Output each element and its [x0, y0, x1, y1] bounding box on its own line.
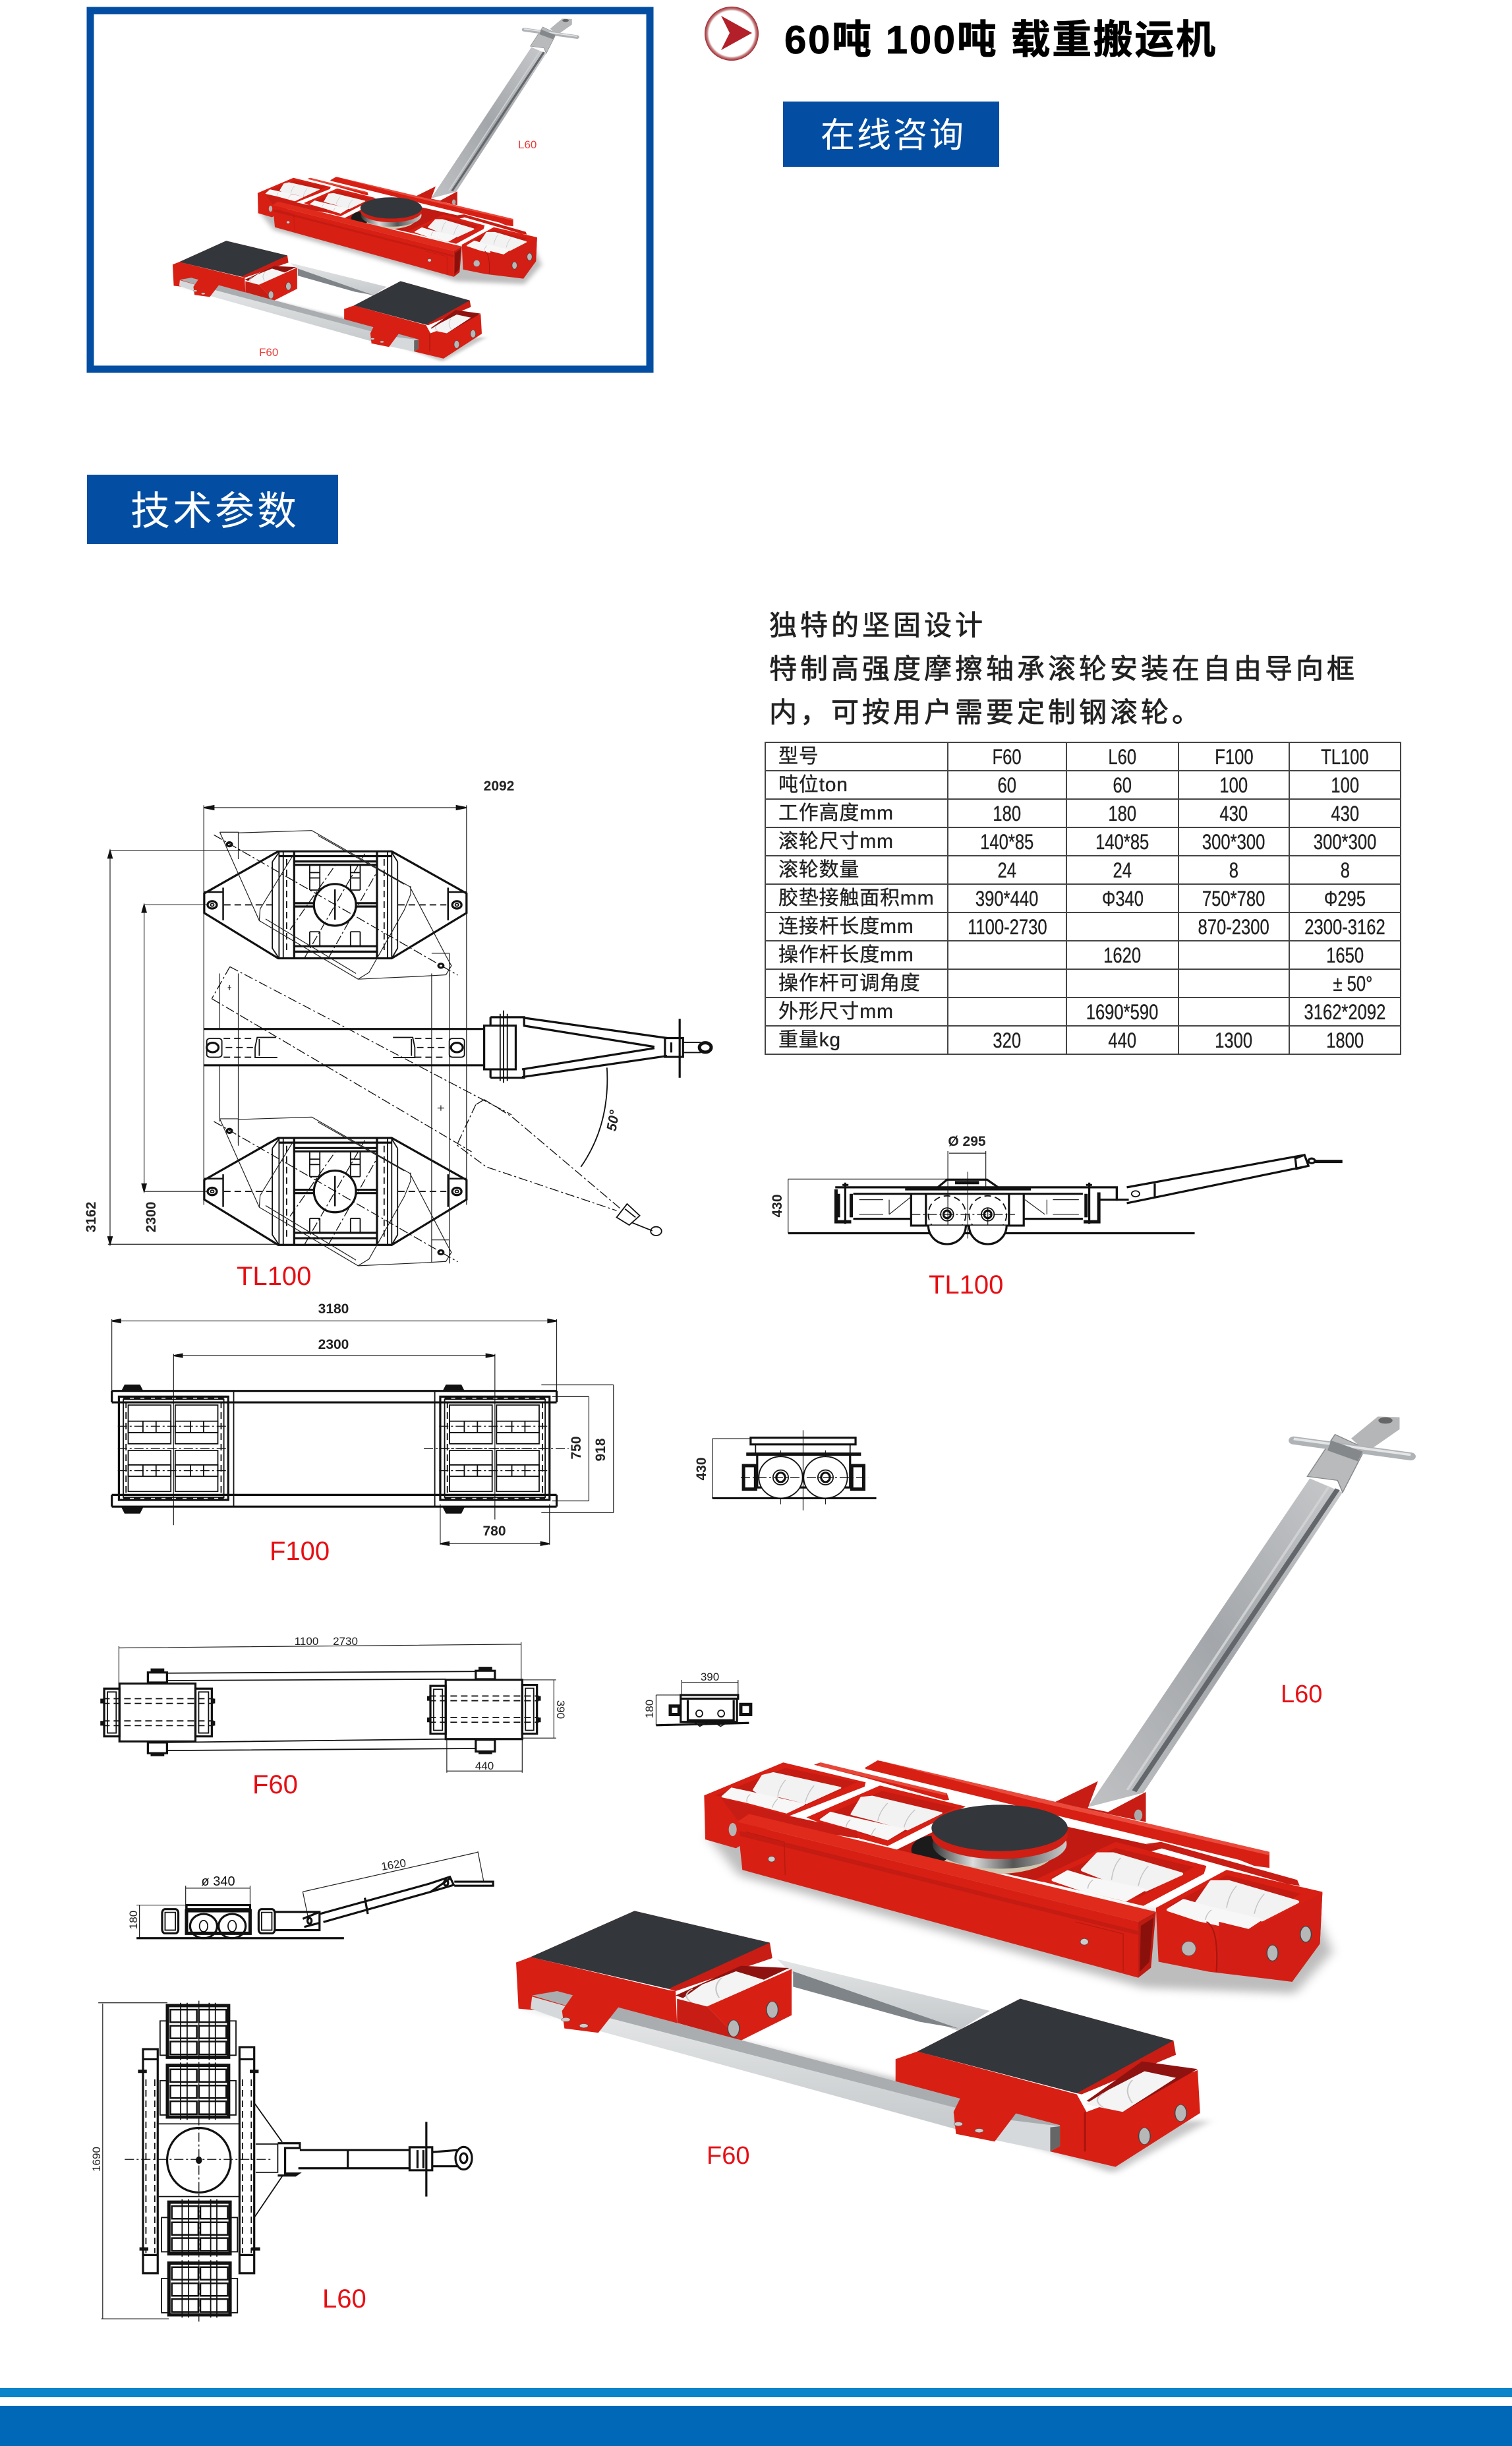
table: technical specifications: Φ295: [1324, 886, 1366, 910]
label: TL100 side view: TL100: [929, 1270, 1003, 1299]
table: technical specifications: 操作杆可调角度: [778, 972, 921, 994]
label: F60 top view: F60: [252, 1770, 298, 1799]
table: technical specifications: 440: [1109, 1029, 1136, 1052]
photo: L60 steerable mover: [704, 1416, 1410, 1994]
table: technical specifications: 2300-3162: [1304, 915, 1385, 939]
drawing: L60 side view: 180: [127, 1911, 140, 1929]
label: F100 top view: F100: [270, 1537, 330, 1566]
photo: F60 fixed mover: [516, 1911, 1209, 2174]
table: technical specifications: 60: [998, 773, 1016, 796]
text block: unique sturdy design: 内，可按用户需要定制钢滚轮。: [769, 697, 1203, 728]
table: technical specifications: 吨位ton: [778, 774, 848, 795]
title: 60吨 100吨 载重搬运机: [784, 18, 1217, 62]
table: technical specifications: ± 50°: [1333, 972, 1372, 996]
table: technical specifications: 24: [998, 858, 1016, 882]
drawing: TL100 top view: [84, 779, 711, 1266]
drawing: F100 top view: [112, 1301, 614, 1545]
table: technical specifications: 1800: [1326, 1029, 1364, 1052]
drawing: TL100 side view: Ø 295: [948, 1134, 986, 1149]
panel: product photo frame: [90, 11, 650, 369]
table: technical specifications: 1300: [1215, 1029, 1252, 1052]
drawing: F100 side view: [694, 1430, 877, 1510]
table: technical specifications: 工作高度mm: [778, 802, 894, 824]
drawing: F100 top view: 2300: [318, 1337, 349, 1352]
drawing: TL100 top view: 2300: [144, 1202, 159, 1232]
table: technical specifications: 60: [1113, 773, 1132, 796]
table: technical specifications: 140*85: [980, 829, 1034, 853]
drawing: TL100 top view: 2092: [484, 779, 514, 794]
front long rail: [738, 1814, 1156, 1922]
table: technical specifications: F60: [993, 745, 1022, 769]
drawing: F60 side view: [643, 1671, 751, 1726]
table: technical specifications: 320: [993, 1029, 1021, 1052]
footer bands: [0, 2388, 1512, 2446]
heading: technical parameters: 技术参数: [131, 489, 299, 533]
button: online consultation: [783, 102, 999, 167]
drawing: TL100 top view: 50°: [604, 1109, 623, 1133]
table: technical specifications: 1650: [1326, 943, 1364, 967]
table: technical specifications: 100: [1220, 773, 1248, 796]
text block: unique sturdy design: [769, 610, 1358, 728]
table: technical specifications: L60: [1109, 745, 1136, 769]
left roller boxes, drawn in close-up coordinates: [704, 1760, 1041, 1848]
drawing: L60 top view: 1690: [90, 2147, 103, 2172]
table: technical specifications: [765, 742, 1401, 1055]
table: technical specifications: 8: [1340, 858, 1350, 882]
drawing: F100 top view: 750: [569, 1436, 584, 1460]
button: online consultation: 在线咨询: [821, 117, 966, 155]
label: TL100 top view: TL100: [237, 1262, 311, 1291]
table: technical specifications: 重量kg: [778, 1029, 841, 1051]
table: technical specifications: 140*85: [1095, 829, 1149, 853]
drawing: F60 top view: 390: [554, 1700, 567, 1719]
label: L60 photo: L60: [1281, 1681, 1322, 1708]
drawing: TL100 top view: 3162: [84, 1202, 99, 1232]
table: technical specifications: TL100: [1321, 745, 1369, 769]
label: F60 photo: F60: [707, 2142, 749, 2170]
table: technical specifications: 3162*2092: [1304, 999, 1385, 1023]
table: technical specifications: 操作杆长度mm: [778, 944, 914, 965]
table: technical specifications: 390*440: [975, 886, 1039, 910]
table: technical specifications: 180: [993, 802, 1021, 825]
table: technical specifications: 870-2300: [1198, 915, 1269, 939]
drawing: F100 top view: 780: [482, 1524, 506, 1539]
text block: unique sturdy design: 特制高强度摩擦轴承滚轮安装在自由导向框: [769, 653, 1358, 684]
front bar: [532, 1991, 1060, 2128]
heading: technical parameters: [87, 475, 338, 544]
text block: unique sturdy design: 独特的坚固设计: [769, 610, 986, 641]
table: technical specifications: 胶垫接触面积mm: [778, 887, 934, 909]
rear long rail: [865, 1761, 1269, 1868]
label: thumbnail F60: F60: [259, 346, 278, 359]
table: technical specifications: 外形尺寸mm: [778, 1001, 894, 1022]
drawing: F100 top view: 3180: [318, 1301, 349, 1317]
drawing: F60 side view: 180: [643, 1700, 656, 1718]
table: technical specifications: 型号: [778, 745, 819, 767]
drawing: L60 top view: [90, 2001, 472, 2321]
drawing: TL100 side view: 430: [770, 1194, 785, 1218]
table: technical specifications: 滚轮数量: [778, 858, 859, 881]
drawing: F60 side view: 390: [701, 1671, 719, 1683]
drawing: L60 side view: ø 340: [201, 1874, 235, 1889]
table: technical specifications: 8: [1229, 858, 1238, 882]
table: technical specifications: 430: [1220, 802, 1248, 825]
photo: thumbnail of both movers inside frame: [173, 18, 577, 361]
table: technical specifications: 连接杆长度mm: [778, 915, 914, 938]
drawing: F60 top view: 1100: [295, 1635, 318, 1648]
table: technical specifications: 滚轮尺寸mm: [778, 831, 894, 852]
drawing: F100 side view: 430: [694, 1457, 709, 1481]
table: technical specifications: 180: [1109, 802, 1136, 825]
left block: [516, 1957, 677, 2024]
drawing: L60 side view: [127, 1851, 493, 1938]
table: technical specifications: 100: [1331, 773, 1359, 796]
icon: red chevron circle: [705, 7, 759, 61]
table: technical specifications: 750*780: [1202, 886, 1265, 910]
table: technical specifications: 1100-2730: [968, 915, 1047, 939]
table: technical specifications: 300*300: [1202, 829, 1265, 853]
drawing: TL100 side view: [770, 1134, 1343, 1244]
drawing: F60 top view: 440: [475, 1760, 494, 1772]
drawing: F100 top view: 918: [593, 1438, 608, 1462]
label: thumbnail L60: L60: [518, 138, 537, 151]
drawing: F60 top view: [102, 1635, 567, 1773]
table: technical specifications: 430: [1331, 802, 1359, 825]
drawing: F60 top view: 2730: [333, 1635, 358, 1648]
label: L60 top view: L60: [322, 2284, 366, 2313]
table: technical specifications: 1690*590: [1086, 999, 1159, 1023]
drawing: L60 side view: 1620: [380, 1857, 407, 1873]
table: technical specifications: 300*300: [1314, 829, 1376, 853]
table: technical specifications: 24: [1113, 858, 1132, 882]
table: technical specifications: 1620: [1104, 943, 1141, 967]
table: technical specifications: Φ340: [1101, 886, 1144, 910]
table: technical specifications: F100: [1215, 745, 1253, 769]
right block: [896, 2052, 1200, 2167]
